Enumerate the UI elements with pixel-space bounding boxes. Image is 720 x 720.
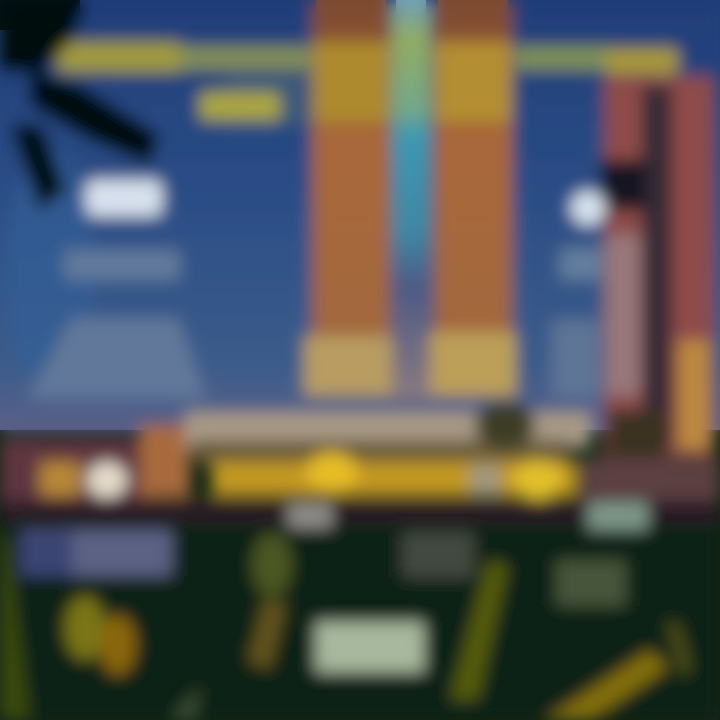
right column icon [571, 191, 605, 225]
title haze between lines [225, 74, 310, 124]
right tower block [600, 76, 714, 460]
lower panel right [556, 560, 626, 606]
right info column [552, 191, 605, 398]
right tower gold foot [678, 340, 710, 450]
gold base left tower [304, 336, 392, 396]
gold band left tower [312, 42, 390, 122]
gold band right tower [434, 42, 512, 122]
dark tree clump [475, 401, 535, 449]
pale pillar [470, 465, 500, 495]
left tower [312, 0, 390, 340]
bright light two [514, 460, 562, 500]
pale frond [170, 685, 200, 720]
podium building [185, 401, 590, 500]
bottom left panel tint [20, 532, 72, 576]
base sky layer [0, 0, 720, 430]
bottom left panel [22, 530, 172, 576]
center left frond [252, 533, 292, 597]
title line two [200, 92, 280, 120]
small frond [248, 600, 286, 670]
right text block one [560, 248, 602, 280]
title line one [58, 42, 678, 74]
copper block [140, 425, 190, 497]
sky tone: lighter left side [5, 150, 95, 390]
dark strip under podium [0, 500, 720, 522]
right tower dark core [642, 85, 672, 445]
diagonal yellow frond [545, 650, 668, 720]
foliage ground [0, 505, 720, 720]
left frond [0, 530, 30, 720]
gold base right tower [430, 332, 516, 396]
light gap between towers [392, 0, 430, 400]
right tower dark window [600, 160, 646, 210]
horizon buildings left [0, 425, 190, 508]
right frond [666, 620, 692, 676]
yellow blob [65, 596, 105, 660]
horizon buildings right [580, 458, 720, 506]
vertical olive frond [450, 560, 508, 700]
podium lit row [212, 462, 577, 496]
bottom center badge [316, 622, 424, 672]
right tower shadow foot [608, 410, 668, 460]
foliage and lower panels [0, 502, 692, 720]
right text block two [552, 320, 600, 398]
podium roof [185, 412, 590, 448]
right pale light [588, 502, 648, 530]
right tower pale section [606, 235, 640, 395]
podium middle [195, 440, 570, 464]
twin towers [304, 0, 516, 400]
right tower [434, 0, 512, 340]
center left light [288, 502, 332, 528]
palm fronds top left [0, 0, 160, 210]
left text block two [28, 318, 206, 398]
left text block one [64, 250, 180, 280]
base top edge colours [0, 0, 508, 30]
orange blob [100, 615, 136, 675]
orange light [40, 462, 80, 496]
white light [87, 462, 127, 498]
left info column [28, 180, 206, 398]
right tower facade [604, 76, 714, 456]
bright light one [306, 452, 358, 492]
base ground layer [0, 430, 720, 720]
lower panel centre [402, 532, 474, 578]
left column heading [86, 180, 162, 216]
night sky background [0, 0, 720, 430]
